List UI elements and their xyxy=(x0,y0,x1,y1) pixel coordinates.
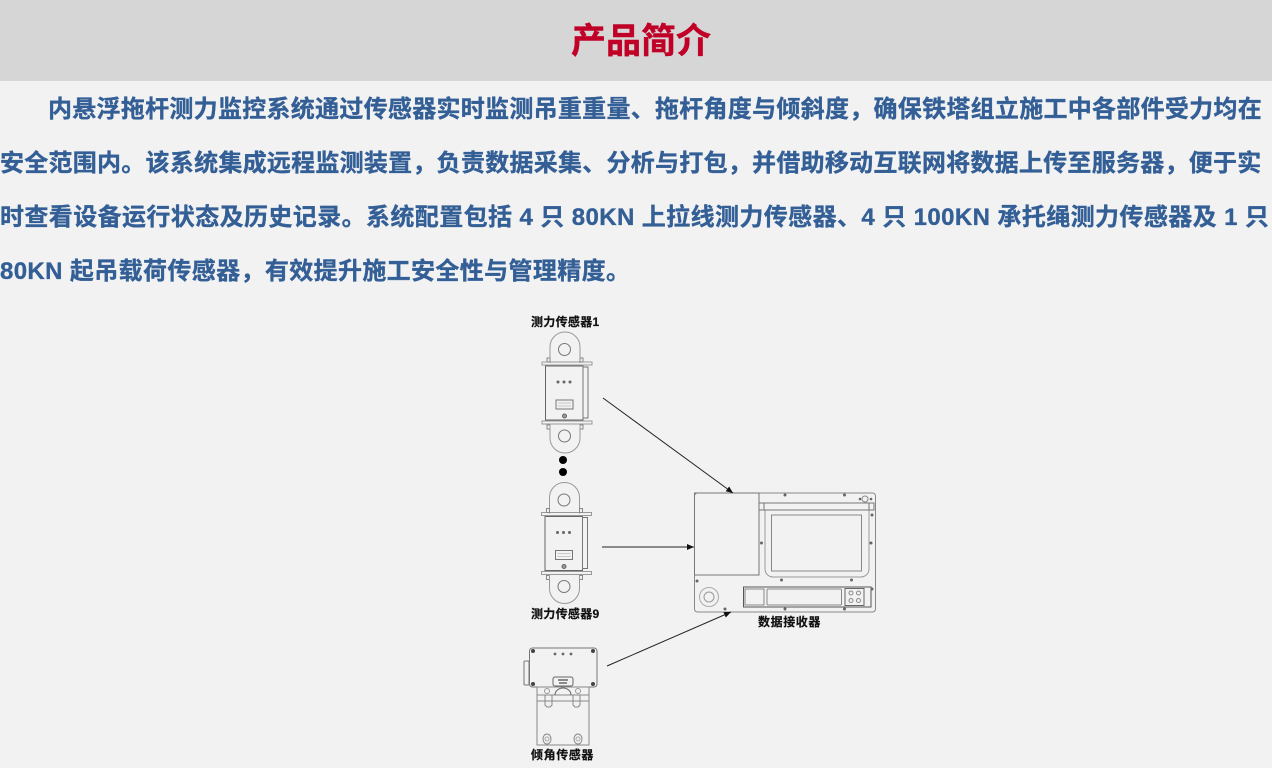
intro paragraph: 80KN 起吊载荷传感器，有效提升施工安全性与管理精度。 xyxy=(0,258,630,285)
intro paragraph xyxy=(0,96,1269,285)
icon: data receiver xyxy=(694,493,876,612)
title band xyxy=(0,0,1272,81)
arrow: sensor 1 to receiver xyxy=(603,398,733,493)
intro paragraph: 时查看设备运行状态及历史记录。系统配置包括 4 只 80KN 上拉线测力传感器、4 只 100KN 承托绳测力传感器及 1 只 xyxy=(0,204,1269,231)
label: tilt sensor: 倾角传感器 xyxy=(531,747,594,762)
label: data receiver: 数据接收器 xyxy=(758,614,821,629)
icon: tilt sensor xyxy=(524,648,597,745)
label: sensor 1: 测力传感器1 xyxy=(531,314,600,329)
arrow: sensor 9 to receiver xyxy=(602,546,694,548)
title: 产品简介 xyxy=(571,22,711,61)
ellipsis dots xyxy=(559,456,567,476)
intro paragraph: 内悬浮拖杆测力监控系统通过传感器实时监测吊重重量、拖杆角度与倾斜度，确保铁塔组立施工中各部件受力均在 xyxy=(48,96,1262,123)
intro paragraph: 安全范围内。该系统集成远程监测装置，负责数据采集、分析与打包，并借助移动互联网将数据上传至服务器，便于实 xyxy=(0,150,1262,177)
arrow: tilt sensor to receiver xyxy=(607,612,731,666)
label: sensor 9: 测力传感器9 xyxy=(531,606,600,621)
icon: force sensor 1 xyxy=(542,332,592,453)
icon: force sensor 9 xyxy=(542,482,592,604)
